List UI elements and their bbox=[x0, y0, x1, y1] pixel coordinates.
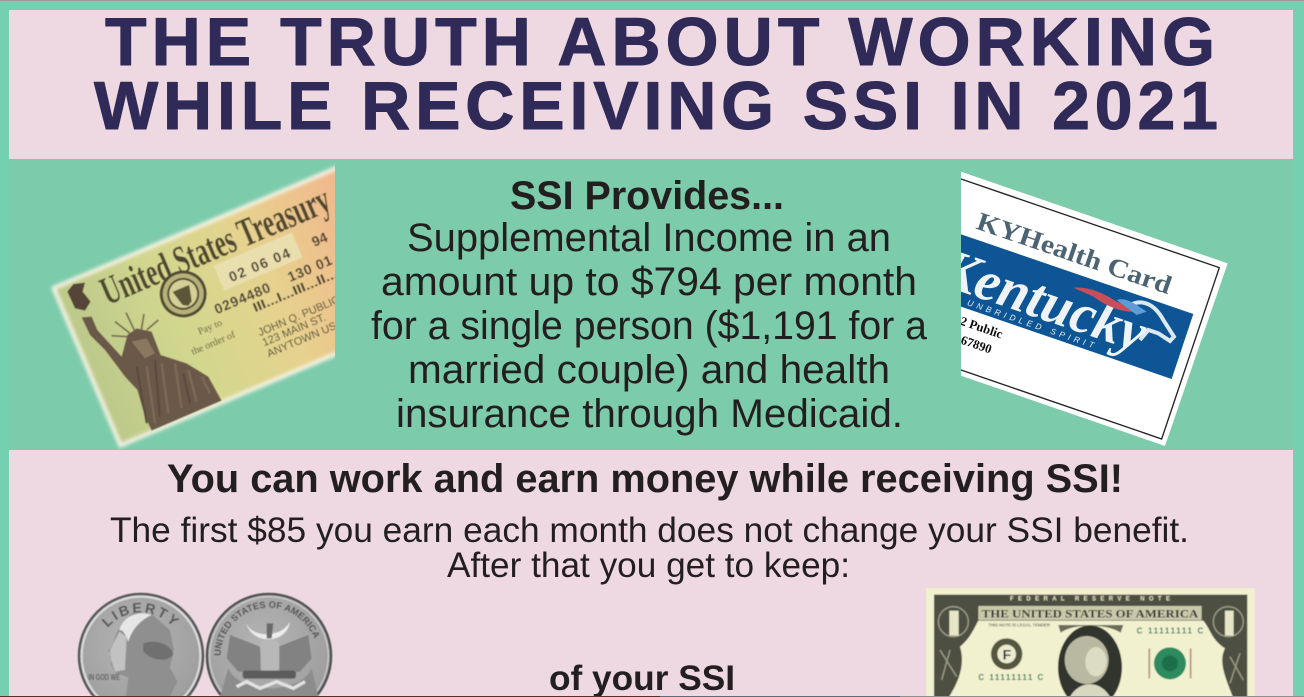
icon: quarter front: LIBERTY bbox=[101, 602, 180, 628]
icon: dollar bill: FEDERAL RESERVE NOTE bbox=[1010, 597, 1170, 603]
icon: dollar bill: C 11111111 C bbox=[978, 673, 1044, 682]
text block: Supplemental Income in an bbox=[407, 216, 891, 260]
icon: dollar bill: THE UNITED STATES OF AMERICA bbox=[982, 608, 1199, 620]
text block: The first $85 you earn each month does not change your SSI benefit. bbox=[110, 511, 1189, 550]
panel: title banner bbox=[9, 4, 1293, 159]
image: treasury check: 94 bbox=[309, 229, 330, 250]
image: treasury check: III...I...III...II...I bbox=[250, 264, 344, 315]
image: treasury check: 02 06 04 bbox=[226, 244, 294, 285]
image: treasury check bbox=[49, 164, 335, 450]
title: WHILE RECEIVING SSI IN 2021 bbox=[94, 68, 1218, 144]
image: treasury check: 130 01 bbox=[285, 252, 335, 285]
text block bbox=[371, 216, 928, 436]
icon: horse bbox=[1130, 302, 1174, 341]
image: treasury check: ANYTOWN USA bbox=[265, 317, 346, 360]
image: KY health card: Kentucky bbox=[932, 237, 1155, 365]
icon: quarter front bbox=[77, 592, 205, 696]
title: THE TRUTH ABOUT WORKING bbox=[105, 4, 1215, 80]
image: KY health card: UNBRIDLED SPIRIT bbox=[966, 297, 1096, 350]
image: treasury check: Pay to bbox=[196, 318, 224, 338]
icon: dollar bill: F bbox=[1003, 646, 1012, 662]
icon: quarter back: UNITED STATES OF AMERICA bbox=[214, 600, 320, 656]
text block: After that you get to keep: bbox=[447, 546, 850, 585]
icon: statue of liberty bbox=[67, 283, 222, 431]
text block bbox=[110, 511, 1189, 585]
image: treasury check: 123 MAIN ST. bbox=[261, 312, 328, 349]
text block: amount up to $794 per month bbox=[381, 260, 917, 304]
image: treasury check: United States Treasury bbox=[94, 176, 337, 314]
heading: You can work and earn money while receiving SSI! bbox=[167, 457, 1123, 501]
image: KY health card: KYHealth Card bbox=[973, 207, 1176, 300]
text block: for a single person ($1,191 for a bbox=[371, 304, 928, 348]
bottom edge strip bbox=[0, 696, 1304, 697]
panel: SSI provides bbox=[371, 174, 928, 436]
image: treasury check: JOHN Q. PUBLIC bbox=[256, 294, 342, 339]
icon: quarter back bbox=[205, 592, 333, 696]
icon: dollar bill bbox=[926, 588, 1255, 697]
text block: married couple) and health bbox=[408, 348, 890, 392]
title bbox=[94, 4, 1218, 144]
image: KY health card: 67890 bbox=[959, 333, 993, 356]
panel: working while on SSI bbox=[9, 450, 1293, 696]
icon: dollar bill: THIS NOTE IS LEGAL TENDER bbox=[988, 623, 1051, 628]
heading: SSI Provides... bbox=[510, 174, 784, 218]
text: of your SSI: of your SSI bbox=[549, 659, 735, 697]
icon: dollar bill: C 11111111 C bbox=[1137, 626, 1204, 635]
icon: quarter front: IN GOD WE bbox=[88, 673, 120, 682]
text block: insurance through Medicaid. bbox=[396, 392, 903, 436]
image: treasury check: the order of bbox=[190, 329, 238, 358]
image: KY health card: 2 Public bbox=[958, 314, 1005, 342]
image: KY health card bbox=[961, 172, 1228, 446]
image: treasury check: 0294480 bbox=[212, 279, 273, 317]
